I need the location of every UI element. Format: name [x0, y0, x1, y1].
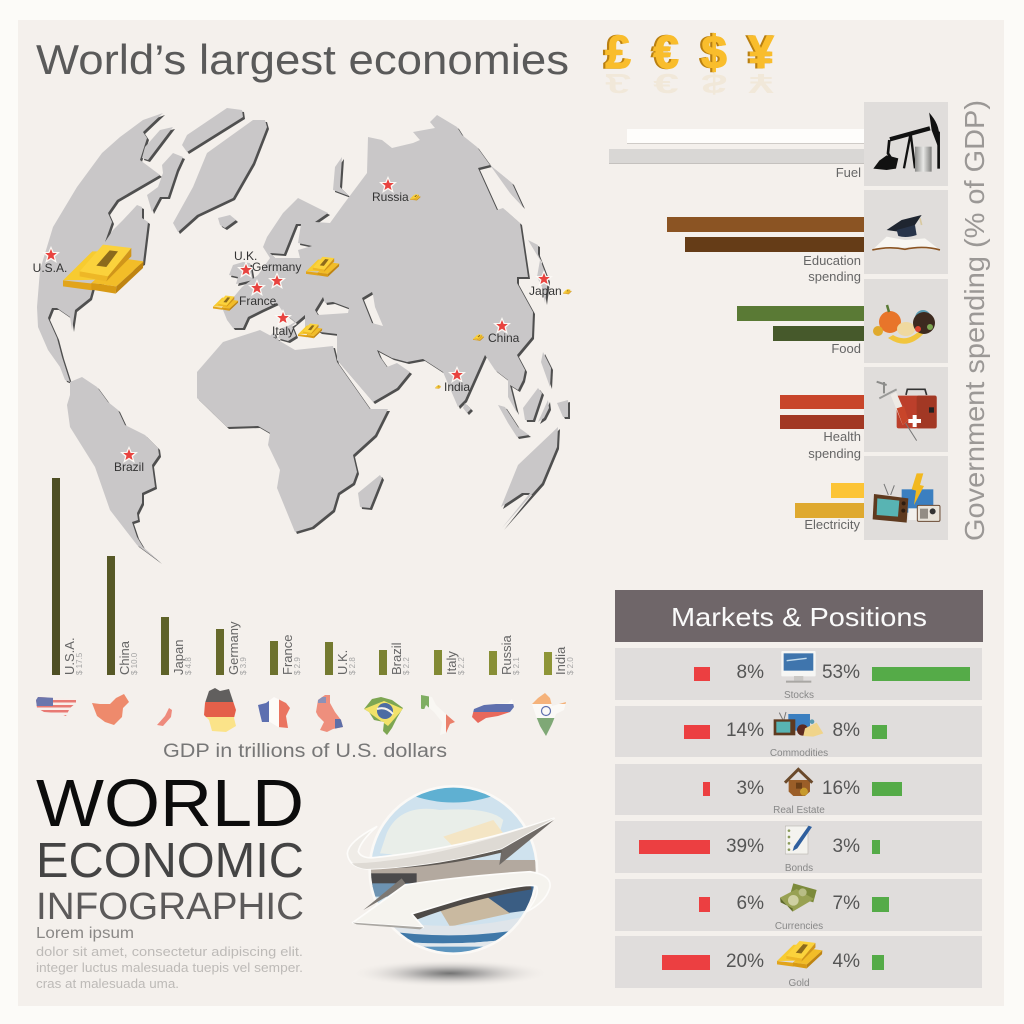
text block: lorem ipsum: cras at malesuada uma.	[36, 977, 179, 991]
row: bonds: Bonds	[785, 863, 813, 874]
row: education	[667, 190, 948, 284]
marker: Japan: Japan	[529, 284, 562, 298]
poster title: INFOGRAPHIC	[36, 886, 304, 928]
bar chart: GDP by country: Germany	[226, 621, 241, 675]
currency icons: £	[605, 67, 631, 98]
row: real estate	[615, 764, 982, 816]
currency icons: $	[701, 26, 727, 78]
marker: India	[435, 366, 470, 394]
row: commodities: 8%	[833, 720, 860, 741]
marker: Brazil: Brazil	[114, 460, 144, 474]
bar chart: GDP by country: India	[553, 646, 568, 675]
row: electricity: Electricity	[804, 517, 860, 532]
row: education: spending	[808, 269, 861, 284]
marker: Brazil	[114, 446, 144, 474]
marker: China	[473, 317, 520, 345]
flag: Italy	[421, 695, 455, 733]
row: commodities	[615, 706, 982, 759]
bar chart: GDP by country: $ 2.9	[293, 657, 302, 675]
poster title: WORLD	[36, 766, 304, 841]
row: commodities: Commodities	[770, 748, 828, 759]
text block: lorem ipsum	[36, 925, 303, 991]
icon: medical case and syringe	[877, 382, 937, 441]
row: fuel	[609, 102, 948, 186]
world map	[33, 108, 571, 564]
row: real estate: Real Estate	[773, 805, 825, 816]
icon: oil pump	[873, 116, 939, 172]
marker: France: France	[239, 294, 277, 308]
flag: China	[92, 694, 129, 725]
row: gold: 20%	[726, 951, 764, 972]
row: food: Food	[831, 341, 861, 356]
bar chart: GDP by country: $ 10.0	[130, 652, 139, 675]
marker: Germany: Germany	[252, 260, 301, 274]
row: health	[780, 367, 948, 461]
currency icons	[603, 26, 774, 98]
icon: monitor	[781, 651, 816, 683]
marker: Russia	[372, 176, 420, 204]
currency icons: ¥	[748, 67, 774, 98]
row: bonds	[615, 821, 982, 874]
bar chart: GDP by country: $ 2.2	[457, 657, 466, 675]
flag: Russia	[472, 700, 514, 723]
bar chart: GDP by country: $ 17.5	[75, 652, 84, 675]
row: real estate: 16%	[822, 778, 860, 799]
bar chart: GDP by country: $ 2.1	[512, 657, 521, 675]
flag: U.S.A.	[36, 697, 76, 716]
flag: U.K.	[316, 695, 343, 732]
arrow: lower	[353, 872, 550, 929]
flag: Japan	[157, 708, 172, 726]
marker: U.K.	[234, 249, 257, 278]
bar chart: GDP by country: $ 2.0	[566, 657, 575, 675]
row: bonds: 3%	[833, 836, 860, 857]
row: food	[737, 279, 948, 363]
text block: lorem ipsum: Lorem ipsum	[36, 925, 134, 942]
currency icons: €	[651, 26, 677, 78]
header	[615, 590, 983, 642]
row: health: Health	[823, 429, 861, 444]
arrow: upper	[347, 818, 554, 869]
flag: Germany	[204, 686, 237, 733]
poster title	[36, 766, 304, 928]
bar chart: GDP by country	[52, 478, 575, 675]
row: gold: 4%	[833, 951, 860, 972]
bar chart: GDP by country: $ 4.8	[184, 657, 193, 675]
marker: Japan	[529, 270, 571, 298]
marker: Italy	[272, 309, 322, 338]
icon: food pile	[873, 305, 935, 344]
row: currencies: 7%	[833, 893, 860, 914]
poster title: ECONOMIC	[36, 834, 304, 888]
bar chart: GDP by country: France	[280, 635, 295, 675]
marker: India: India	[444, 380, 470, 394]
icon: banknotes	[780, 883, 817, 912]
header: Markets & Positions	[671, 602, 927, 632]
row: fuel: Fuel	[836, 165, 861, 180]
bar chart: GDP by country: $ 2.8	[348, 657, 357, 675]
marker: U.S.A.	[33, 245, 144, 294]
row: real estate: 3%	[737, 778, 764, 799]
row: stocks: Stocks	[784, 690, 814, 701]
flag: Brazil	[364, 697, 403, 735]
text block: lorem ipsum: integer luctus malesuada tuepis vel semper.	[36, 961, 303, 975]
title: World’s largest economies	[36, 36, 569, 83]
icon: document and pen	[785, 826, 812, 854]
row: stocks: 8%	[737, 662, 764, 683]
marker: France	[213, 279, 277, 311]
bar chart: GDP by country: Italy	[444, 651, 459, 675]
row: gold	[615, 936, 982, 989]
section label: Government spending (% of GDP)	[959, 100, 990, 541]
marker: U.S.A.: U.S.A.	[33, 261, 67, 275]
currency icons: £	[603, 26, 629, 78]
currency icons: ¥	[746, 26, 772, 78]
currency icons: €	[653, 26, 679, 78]
panel: markets and positions	[615, 590, 983, 989]
text block: lorem ipsum: dolor sit amet, consectetur adipiscing elit.	[36, 945, 303, 959]
bar chart: GDP by country: U.K.	[335, 650, 350, 675]
icon: graduation cap on book	[872, 215, 940, 250]
row: commodities: 14%	[726, 720, 764, 741]
currency icons: $	[701, 67, 727, 98]
country flag maps	[36, 686, 568, 738]
row: currencies: 6%	[737, 893, 764, 914]
bar chart: GDP by country: Japan	[171, 640, 186, 675]
currency icons: $	[699, 26, 725, 78]
currency icons: £	[605, 26, 631, 78]
marker: Italy: Italy	[272, 324, 294, 338]
row: stocks	[615, 648, 982, 701]
bar chart: GDP by country: China	[117, 640, 132, 675]
row: health: spending	[808, 446, 861, 461]
row: education: Education	[803, 253, 861, 268]
bar chart: GDP by country: $ 2.2	[402, 657, 411, 675]
globe with arrows	[347, 785, 554, 987]
marker: Russia: Russia	[372, 190, 409, 204]
currency icons: ¥	[748, 26, 774, 78]
row: bonds: 39%	[726, 836, 764, 857]
currency icons: €	[653, 67, 679, 98]
bar chart: GDP by country: U.S.A.	[62, 637, 77, 675]
row: currencies	[615, 879, 982, 932]
marker: U.K.: U.K.	[234, 249, 257, 263]
row: electricity	[795, 456, 948, 540]
panel: government spending	[609, 100, 990, 541]
bar chart: GDP by country: $ 3.9	[239, 657, 248, 675]
icon: electronics	[873, 473, 940, 523]
flag: India	[532, 693, 566, 736]
row: gold: Gold	[788, 978, 810, 989]
flag: France	[258, 697, 290, 728]
marker: China: China	[488, 331, 520, 345]
chart caption: GDP in trillions of U.S. dollars	[163, 741, 447, 762]
marker: Germany	[252, 257, 339, 289]
icon: gold bars	[777, 941, 822, 968]
icon: house	[785, 769, 812, 796]
bar chart: GDP by country: Brazil	[389, 642, 404, 675]
row: currencies: Currencies	[775, 921, 823, 932]
icon: commodities	[774, 712, 823, 737]
row: stocks: 53%	[822, 662, 860, 683]
bar chart: GDP by country: Russia	[499, 634, 514, 675]
